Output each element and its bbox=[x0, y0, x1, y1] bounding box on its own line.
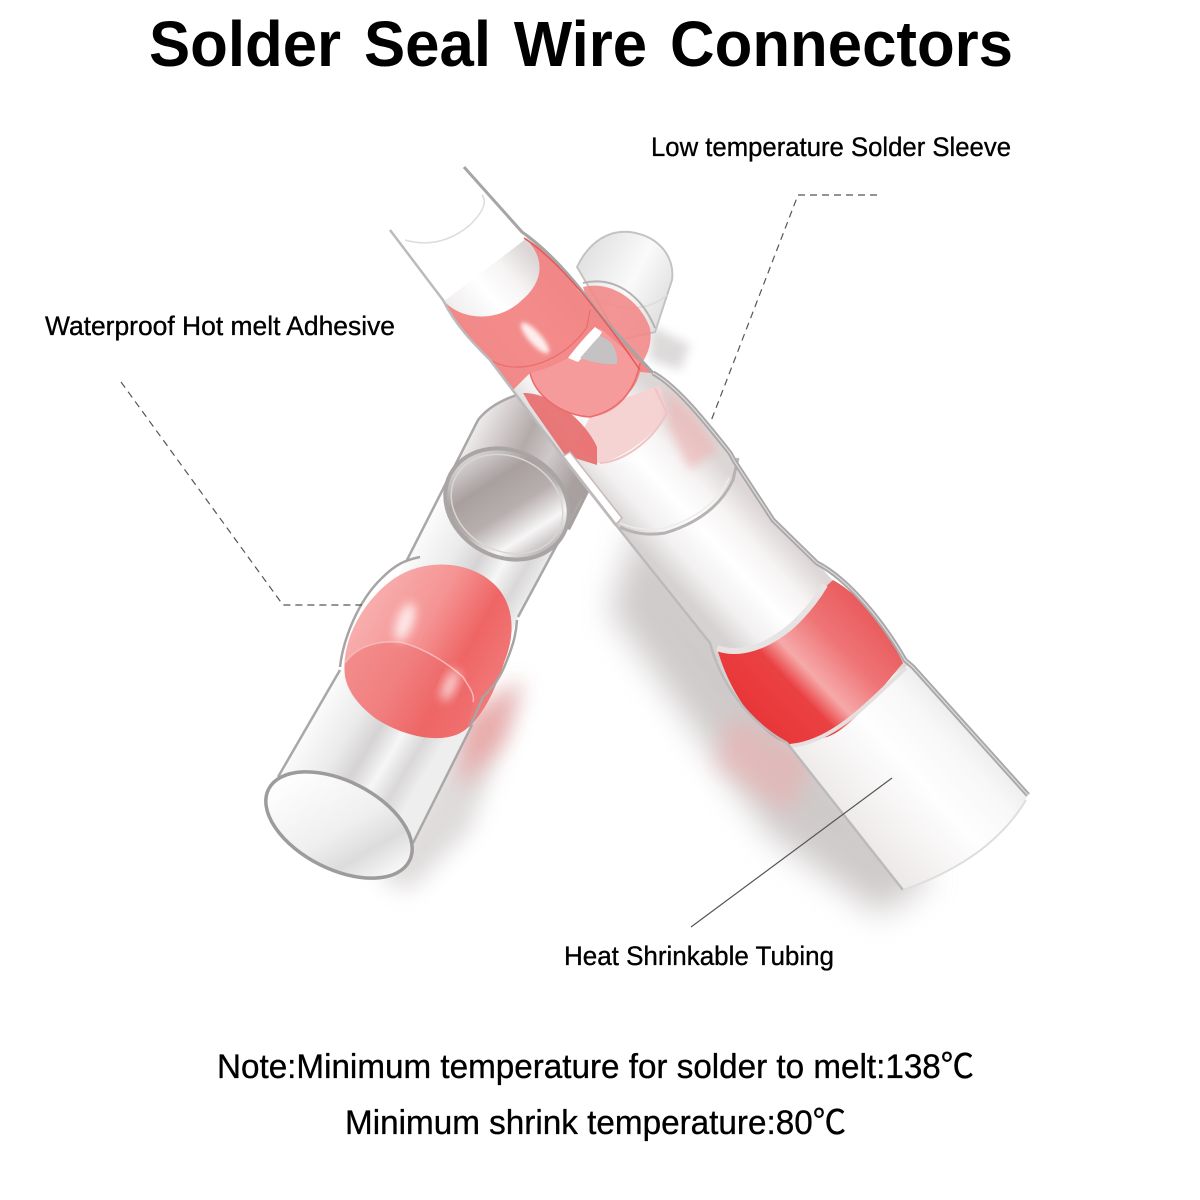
connector: lower left bbox=[249, 393, 600, 900]
soft shadows under the connectors bbox=[380, 325, 930, 915]
white lip below band bbox=[790, 668, 906, 746]
left connector upper tube bbox=[278, 393, 600, 843]
red edge accent bbox=[524, 238, 640, 370]
left connector open end bbox=[249, 750, 429, 900]
white hole with grey wedge bbox=[568, 327, 602, 362]
label: heat shrinkable tubing: Heat Shrinkable Tubing bbox=[564, 941, 834, 971]
note: temperatures: Minimum shrink temperature:80℃ bbox=[345, 1104, 846, 1142]
red upper solder section bbox=[443, 240, 652, 417]
leader line: solder sleeve bbox=[711, 195, 877, 421]
note: temperatures bbox=[217, 1048, 974, 1142]
sleeve rim curve bbox=[620, 458, 738, 534]
left connector outline bbox=[278, 393, 582, 843]
lower heat shrink tube bbox=[790, 665, 1028, 890]
red crescent under the solder bbox=[523, 393, 597, 465]
connector: upper right bbox=[390, 167, 1028, 890]
open mouth at top bbox=[390, 167, 527, 302]
label: low temperature solder sleeve: Low temperature Solder Sleeve bbox=[651, 132, 1011, 162]
left connector inner opening bbox=[426, 427, 588, 581]
pink collar below solder bbox=[575, 385, 667, 463]
first solder cylinder rim bbox=[490, 310, 590, 367]
label: waterproof hot melt adhesive: Waterproof Hot melt Adhesive bbox=[45, 311, 395, 341]
illustration: two solder seal connectors bbox=[249, 167, 1028, 915]
tube outer edges bbox=[464, 167, 653, 373]
white tab slot bbox=[562, 452, 622, 525]
note: temperatures: Note:Minimum temperature for solder to melt:138℃ bbox=[217, 1048, 974, 1086]
white lip above band bbox=[717, 585, 825, 651]
left connector shaded collar bbox=[445, 393, 600, 530]
leader line: heat shrinkable tubing bbox=[691, 778, 892, 927]
red lower sealing band bbox=[717, 580, 903, 745]
adhesive inner cup bbox=[345, 642, 473, 738]
connector back tube: upper right stub bbox=[577, 232, 672, 365]
title: Solder Seal Wire Connectors bbox=[149, 8, 1013, 80]
second solder cylinder bbox=[530, 328, 640, 417]
leader line: hot melt adhesive bbox=[121, 382, 362, 605]
waterproof adhesive red ball bbox=[344, 564, 512, 738]
solder highlight bbox=[517, 319, 553, 357]
right connector tube body bbox=[390, 167, 1028, 890]
